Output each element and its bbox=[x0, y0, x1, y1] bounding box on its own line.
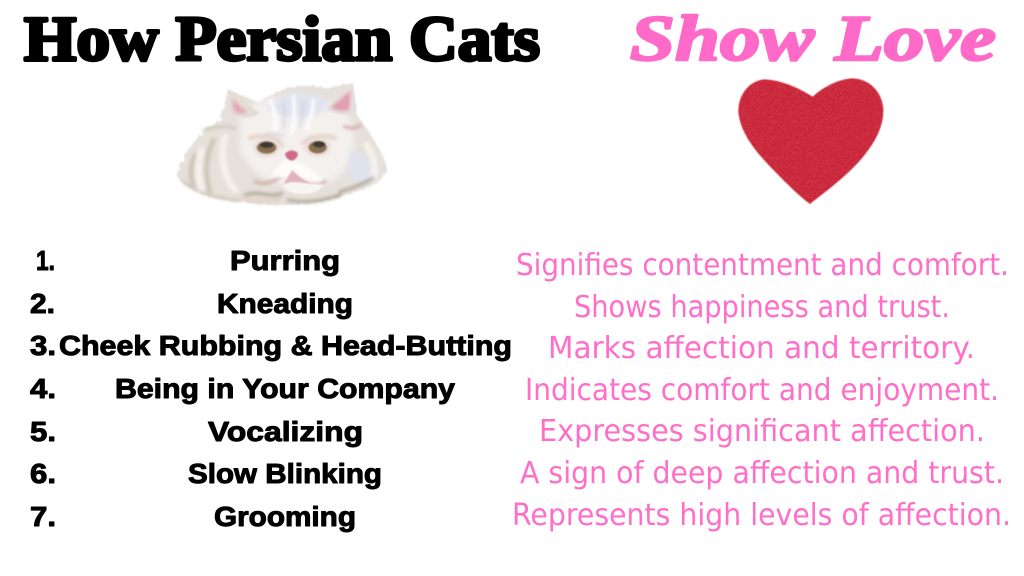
numbered list of affection behaviours bbox=[30, 245, 512, 532]
item 1: Purring bbox=[36, 245, 340, 276]
meanings column in pink bbox=[512, 248, 1011, 533]
illustration: red felt heart bbox=[738, 78, 883, 204]
item 5: Vocalizing: 5. bbox=[30, 416, 56, 447]
item 2: Kneading: Kneading bbox=[217, 288, 353, 319]
meaning 6: A sign of deep affection and trust. bbox=[520, 456, 1004, 491]
item 3: Cheek Rubbing and Head-Butting: Cheek Rubbing & Head-Butting bbox=[59, 330, 512, 361]
meaning 3: Marks affection and territory. bbox=[548, 331, 975, 366]
item 1: Purring: 1. bbox=[36, 245, 55, 276]
title: Show Love: Show Love bbox=[630, 3, 996, 75]
title: How Persian Cats: How Persian Cats bbox=[24, 4, 540, 74]
item 4: Being in Your Company: 4. bbox=[30, 373, 56, 404]
item 4: Being in Your Company: Being in Your Company bbox=[115, 373, 455, 404]
item 2: Kneading bbox=[30, 288, 353, 319]
illustration: white Persian cat bbox=[177, 83, 387, 205]
meaning 5: Expresses significant affection. bbox=[539, 414, 985, 449]
meaning 2: Shows happiness and trust. bbox=[574, 290, 950, 325]
item 5: Vocalizing bbox=[30, 416, 363, 447]
item 7: Grooming bbox=[30, 501, 356, 532]
meaning 4: Indicates comfort and enjoyment. bbox=[525, 373, 999, 408]
item 2: Kneading: 2. bbox=[30, 288, 55, 319]
item 1: Purring: Purring bbox=[230, 245, 340, 276]
item 6: Slow Blinking: Slow Blinking bbox=[188, 458, 382, 489]
item 5: Vocalizing: Vocalizing bbox=[208, 416, 363, 447]
item 6: Slow Blinking bbox=[30, 458, 382, 489]
item 7: Grooming: Grooming bbox=[214, 501, 356, 532]
item 7: Grooming: 7. bbox=[30, 501, 56, 532]
item 6: Slow Blinking: 6. bbox=[30, 458, 56, 489]
item 3: Cheek Rubbing and Head-Butting: 3. bbox=[30, 330, 56, 361]
